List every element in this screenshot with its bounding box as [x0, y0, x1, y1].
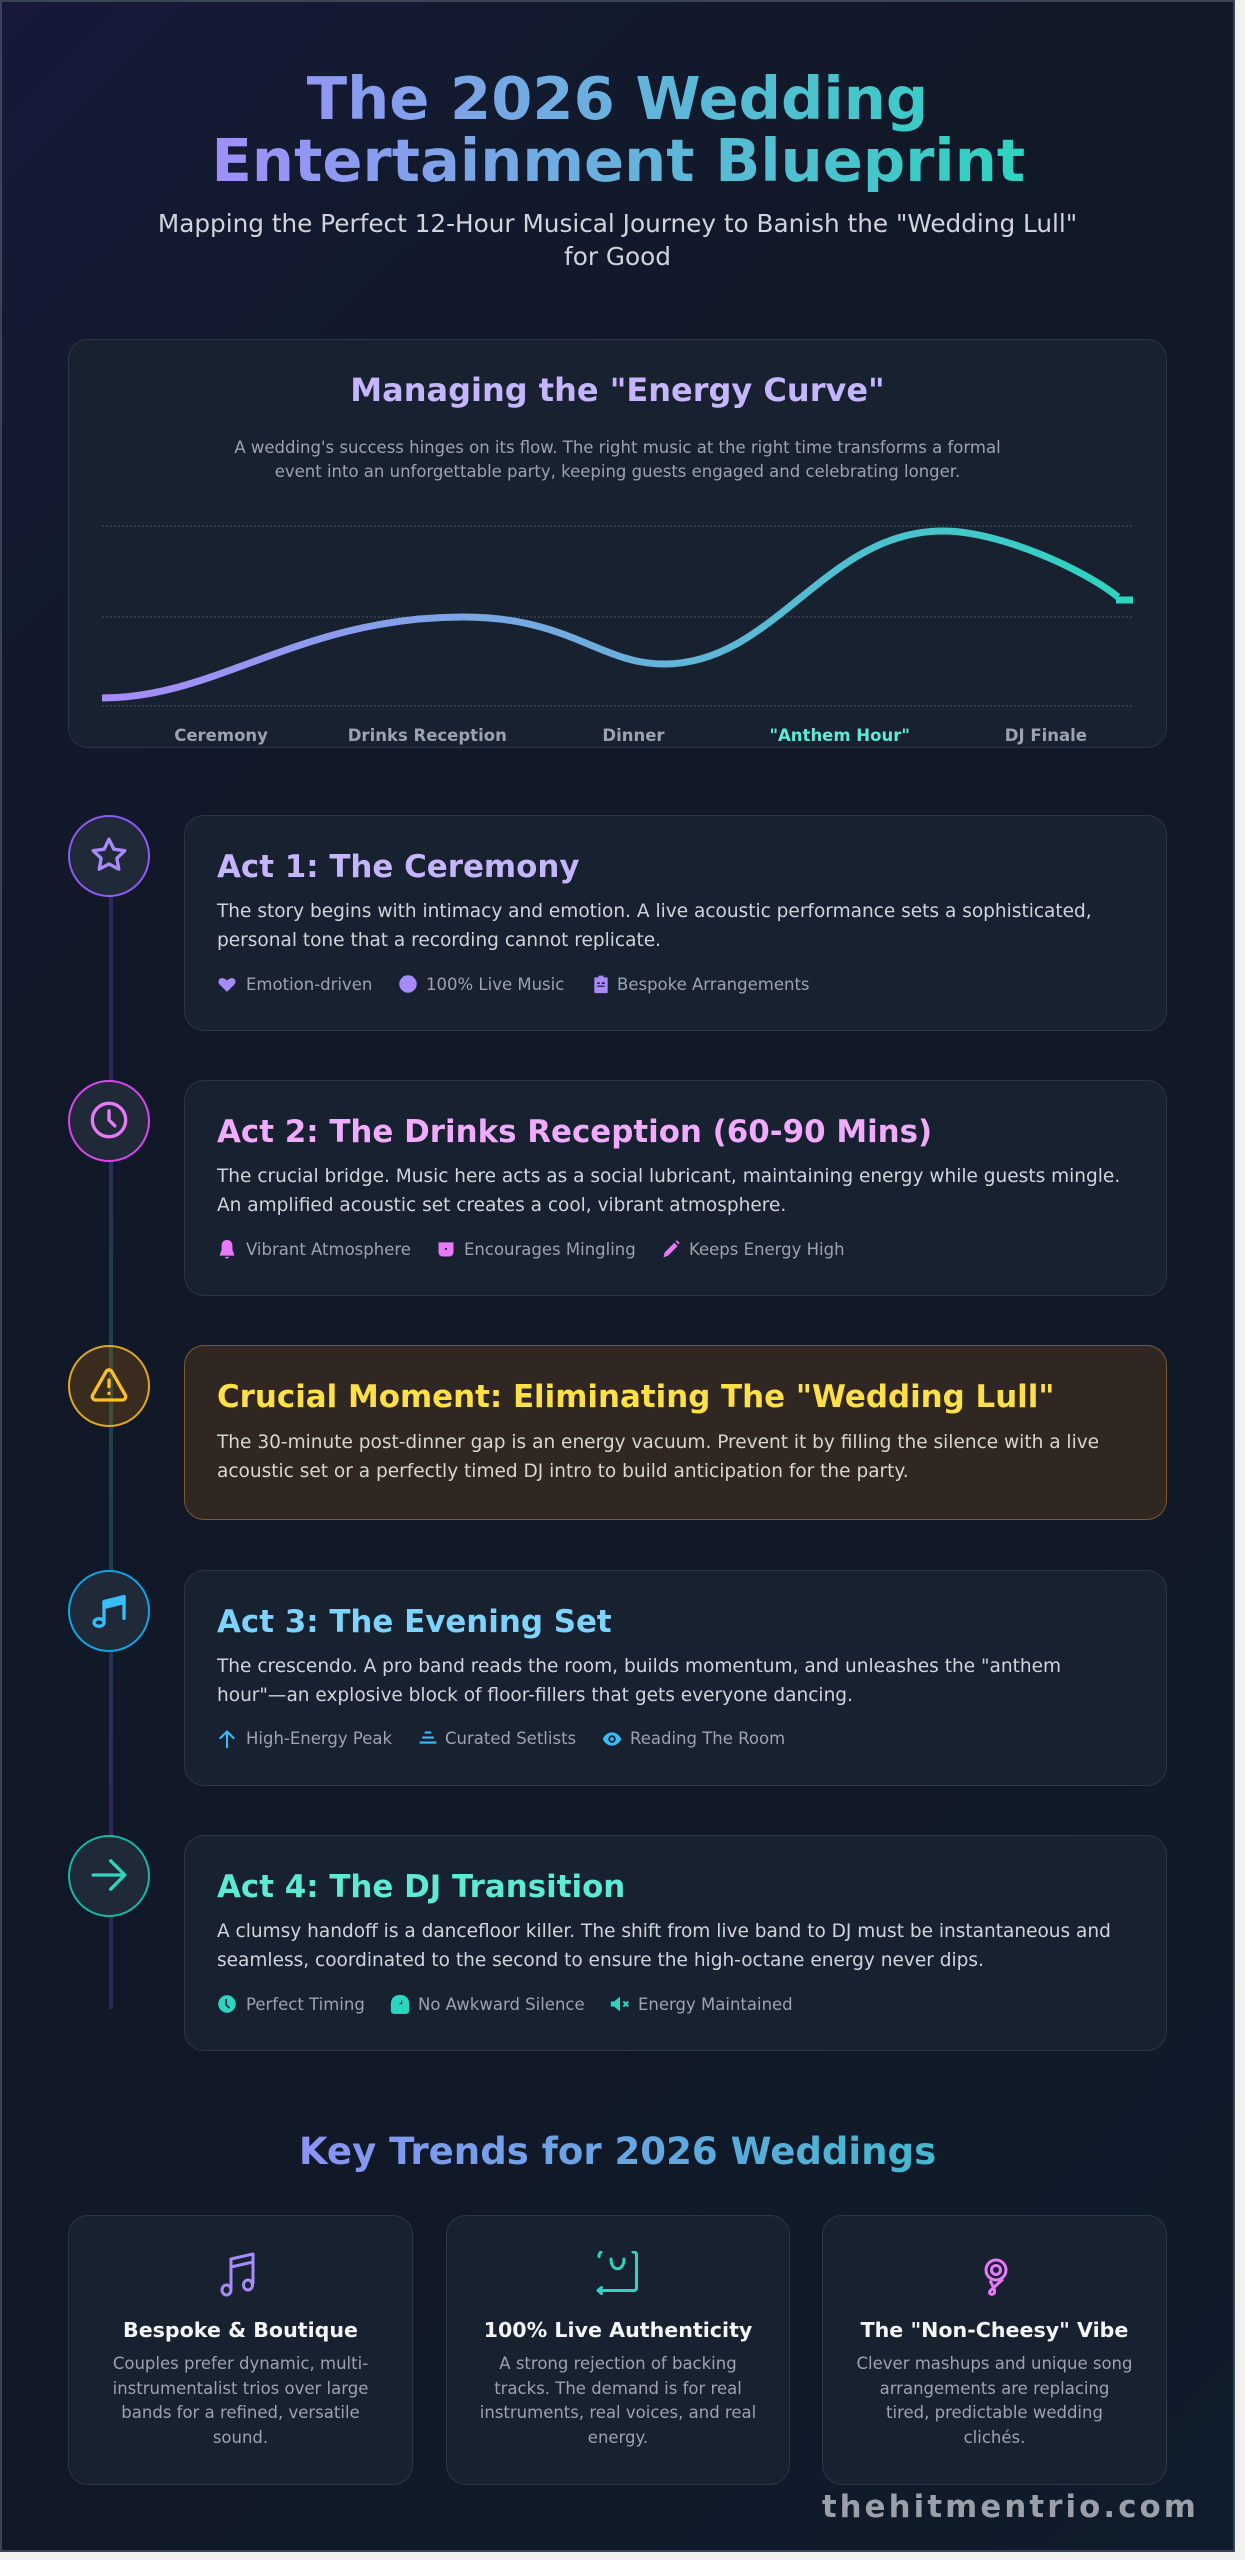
icon: layers	[420, 1732, 436, 1744]
chart labels: "Anthem Hour"	[769, 726, 910, 745]
panel heading: Managing the "Energy Curve"	[350, 371, 885, 409]
tag: high-energy peak: High-Energy Peak	[246, 1729, 392, 1748]
trend card: non-cheesy vibe	[822, 2215, 1167, 2485]
subtitle	[158, 209, 1077, 270]
tag: live music: 100% Live Music	[426, 975, 564, 994]
act 3 body: The crescendo. A pro band reads the room, builds momentum, and unleashes the "anthem	[217, 1656, 1061, 1677]
trend description	[113, 2354, 368, 2447]
chart labels: Ceremony	[174, 726, 268, 745]
icon: clipboard	[594, 976, 608, 994]
icon: music notes	[220, 2252, 254, 2296]
act 3 heading: Act 3: The Evening Set	[217, 1604, 612, 1640]
title: The 2026 Wedding	[307, 64, 928, 133]
watermark: thehitmentrio.com	[822, 2488, 1199, 2524]
act 1 body: personal tone that a recording cannot replicate.	[217, 930, 661, 951]
trend title: The "Non-Cheesy" Vibe	[861, 2318, 1128, 2342]
title	[212, 68, 1024, 192]
icon node: star	[68, 815, 150, 897]
icon node: clock	[68, 1080, 150, 1162]
trend description: sound.	[213, 2428, 268, 2447]
section heading: key trends: Key Trends for 2026 Weddings	[299, 2130, 936, 2173]
trend description: arrangements are replacing	[880, 2379, 1109, 2398]
trend card: live authenticity	[446, 2215, 790, 2485]
icon: circle	[399, 975, 417, 993]
icon: pink rosette	[984, 2258, 1008, 2296]
trend card: bespoke	[68, 2215, 413, 2485]
act 2 heading: Act 2: The Drinks Reception (60-90 Mins)	[217, 1114, 932, 1150]
card: act 2	[184, 1080, 1167, 1296]
panel description: event into an unforgettable party, keeping guests engaged and celebrating longer.	[275, 462, 960, 481]
trend description: bands for a refined, versatile	[121, 2403, 360, 2422]
icon: eye	[602, 1732, 622, 1746]
trend description: tired, predictable wedding	[886, 2403, 1103, 2422]
panel: energy curve	[68, 339, 1167, 748]
act 1 body: The story begins with intimacy and emotion. A live acoustic performance sets a sophisticated,	[217, 901, 1092, 922]
line chart: energy curve	[102, 526, 1133, 706]
panel description	[234, 438, 1001, 481]
trend description	[480, 2354, 756, 2447]
subtitle: for Good	[564, 242, 671, 270]
act 2 body	[216, 1166, 1120, 1216]
crucial moment body: The 30-minute post-dinner gap is an energy vacuum. Prevent it by filling the silence with a live	[217, 1432, 1099, 1453]
trend description: clichés.	[964, 2428, 1025, 2447]
tag: energy maintained: Energy Maintained	[638, 1995, 793, 2014]
act 2 body: The crucial bridge. Music here acts as a social lubricant, maintaining energy while guests mingle.	[217, 1166, 1120, 1187]
trend title: 100% Live Authenticity	[484, 2318, 752, 2342]
tag: bespoke arrangements: Bespoke Arrangements	[617, 975, 810, 994]
trend description: instrumentalist trios over large	[113, 2379, 368, 2398]
crucial moment body	[216, 1432, 1099, 1482]
act 2 body: An amplified acoustic set creates a cool, vibrant atmosphere.	[217, 1195, 786, 1216]
act 4 body	[217, 1921, 1111, 1971]
act 4 heading: Act 4: The DJ Transition	[217, 1869, 625, 1905]
icon node: music note	[68, 1570, 150, 1652]
tag: no awkward silence: No Awkward Silence	[418, 1995, 585, 2014]
tag: encourages mingling: Encourages Mingling	[464, 1240, 636, 1259]
chart labels: DJ Finale	[1005, 726, 1087, 745]
icon: pencil	[664, 1240, 680, 1258]
chart labels: Drinks Reception	[348, 726, 507, 745]
chart labels	[174, 726, 1087, 745]
act 4 body: A clumsy handoff is a dancefloor killer. The shift from live band to DJ must be instantaneous and	[217, 1921, 1111, 1942]
act 3 body	[216, 1656, 1061, 1706]
panel description: A wedding's success hinges on its flow. The right music at the right time transforms a formal	[234, 438, 1001, 456]
trend description: instruments, real voices, and real	[480, 2403, 756, 2422]
trend description: Clever mashups and unique song	[857, 2354, 1132, 2373]
tag: perfect timing: Perfect Timing	[246, 1995, 365, 2014]
trend description	[857, 2354, 1132, 2447]
card: act 3	[184, 1570, 1167, 1786]
tag: reading the room: Reading The Room	[630, 1729, 785, 1748]
timeline line	[109, 815, 113, 2009]
icon node: warning	[68, 1345, 150, 1427]
icon: muted speaker	[610, 1996, 629, 2012]
tag: curated setlists: Curated Setlists	[445, 1729, 576, 1748]
subtitle: Mapping the Perfect 12-Hour Musical Journey to Banish the "Wedding Lull"	[158, 209, 1077, 238]
title: Entertainment Blueprint	[212, 126, 1025, 195]
icon: square badge	[438, 1242, 454, 1256]
card: crucial moment	[184, 1345, 1167, 1520]
trend description: energy.	[588, 2428, 648, 2447]
icon: clock filled	[218, 1995, 236, 2013]
trend title: Bespoke & Boutique	[123, 2318, 358, 2342]
tag: keeps energy high: Keeps Energy High	[689, 1240, 845, 1259]
icon: up arrow	[219, 1730, 235, 1748]
icon: dome clock	[390, 1994, 410, 2014]
trend description: Couples prefer dynamic, multi-	[113, 2354, 368, 2373]
icon: live bracket	[596, 2251, 638, 2295]
trend description: tracks. The demand is for real	[494, 2379, 742, 2398]
card: act 4	[184, 1835, 1167, 2051]
trend description: A strong rejection of backing	[499, 2354, 737, 2373]
act 4 body: seamless, coordinated to the second to ensure the high-octane energy never dips.	[217, 1950, 984, 1971]
act 1 heading: Act 1: The Ceremony	[217, 849, 579, 885]
tag: emotion-driven: Emotion-driven	[246, 975, 372, 994]
chart labels: Dinner	[602, 726, 665, 745]
act 1 body	[216, 901, 1092, 951]
icon: heart	[218, 978, 236, 992]
tag: vibrant atmosphere: Vibrant Atmosphere	[246, 1240, 411, 1259]
icon: bell	[220, 1240, 234, 1259]
icon node: arrow	[68, 1835, 150, 1917]
card: act 1	[184, 815, 1167, 1030]
act 3 body: hour"—an explosive block of floor-fillers that gets everyone dancing.	[217, 1685, 853, 1706]
crucial moment body: acoustic set or a perfectly timed DJ intro to build anticipation for the party.	[217, 1461, 909, 1482]
crucial moment heading: Crucial Moment: Eliminating The "Wedding Lull"	[217, 1379, 1054, 1415]
